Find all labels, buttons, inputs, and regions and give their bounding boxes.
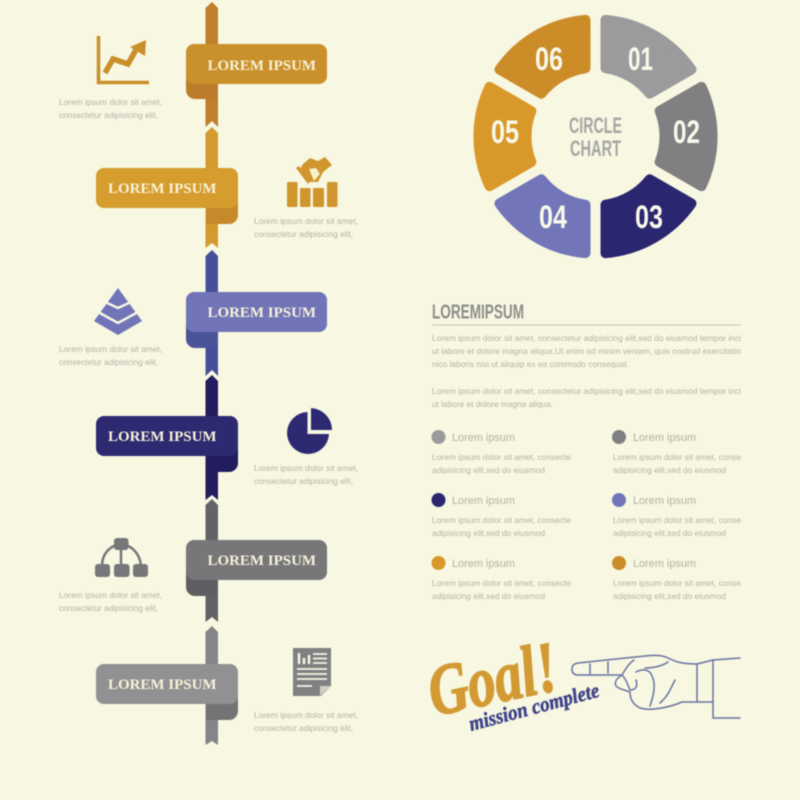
legend item: periwinkle: Lorem ipsum dolor sit amet, conse: [613, 515, 741, 525]
legend item: navy: adipisicing elit,sed do eiusmod: [432, 528, 545, 538]
segment 01: [606, 20, 692, 94]
center label: CIRCLE: [569, 113, 622, 138]
legend item: navy: Lorem ipsum: [452, 495, 515, 507]
icon: pyramid: [94, 288, 142, 335]
legend item: light grey: Lorem ipsum dolor sit amet, consecte: [432, 452, 571, 462]
legend item: dark gold: [612, 556, 741, 601]
heading: LOREMIPSUM: [432, 302, 524, 324]
caption 5: Lorem ipsum dolor sit amet,: [59, 590, 162, 600]
caption 6: consectetur adipisicing elit,: [254, 723, 353, 733]
caption 6: Lorem ipsum dolor sit amet,: [254, 710, 358, 720]
banner 1: LOREM IPSUM: [208, 58, 316, 74]
legend item: dark grey: [612, 430, 741, 475]
segment numbers: [491, 41, 700, 235]
paragraph text: Lorem ipsum dolor sit amet, consectetur adipisicing elit,sed do eiusmod tempor inci: [432, 386, 741, 396]
legend item: dark gold: Lorem ipsum dolor sit amet, conse: [613, 578, 741, 588]
caption 2: Lorem ipsum dolor sit amet,: [254, 216, 358, 226]
icon: line chart: [98, 36, 149, 82]
timeline spine: [206, 2, 218, 745]
segment 04: [500, 179, 586, 253]
legend item: periwinkle: [612, 493, 741, 538]
legend item: navy: Lorem ipsum dolor sit amet, consecte: [432, 515, 571, 525]
banner 6: [96, 664, 238, 720]
segment 06: [500, 0, 606, 106]
caption 2: [254, 216, 358, 239]
circle chart: [447, 0, 744, 278]
paragraph text: [432, 333, 741, 409]
legend item: dark grey: Lorem ipsum dolor sit amet, conse: [613, 452, 741, 462]
segment numbers: 05: [491, 114, 519, 150]
banner 6: LOREM IPSUM: [108, 677, 217, 693]
caption 4: [254, 463, 358, 486]
caption 5: consectetur adipisicing elit,: [59, 603, 158, 613]
caption 1: consectetur adipisicing elit,: [59, 110, 158, 120]
segment numbers: 06: [535, 41, 563, 77]
banner 2: [96, 168, 238, 224]
center label: [569, 113, 622, 161]
banner 2: LOREM IPSUM: [108, 181, 217, 197]
segment 02: [638, 87, 744, 198]
caption 3: consectetur adipisicing elit,: [59, 357, 158, 367]
center label: CHART: [570, 136, 621, 161]
icon: handshake and bars: [287, 157, 338, 207]
legend item: light gold: Lorem ipsum dolor sit amet, consecte: [432, 578, 571, 588]
legend item: dark gold: adipisicing elit,sed do eiusmod: [613, 591, 726, 601]
banner 3: [186, 292, 327, 348]
caption 1: [59, 97, 162, 120]
banner 5: LOREM IPSUM: [208, 553, 316, 569]
icon: network hierarchy: [95, 538, 148, 577]
legend item: light grey: adipisicing elit,sed do eiusmod: [432, 465, 545, 475]
segment numbers: 02: [673, 114, 700, 150]
legend item: dark gold: Lorem ipsum: [633, 558, 696, 570]
legend item: dark grey: Lorem ipsum: [633, 432, 696, 444]
icon: pointing hand: [572, 655, 740, 718]
segment numbers: 03: [635, 199, 663, 235]
legend item: light gold: Lorem ipsum: [452, 558, 515, 570]
caption 2: consectetur adipisicing elit,: [254, 229, 353, 239]
legend item: light grey: [432, 430, 571, 475]
legend item: light grey: Lorem ipsum: [452, 432, 515, 444]
segment 05: [447, 75, 553, 186]
caption 4: Lorem ipsum dolor sit amet,: [254, 463, 358, 473]
icon: document: [293, 648, 331, 696]
segment 03: [585, 167, 691, 278]
goal lettering: mission complete: [466, 678, 602, 736]
paragraph text: Lorem ipsum dolor sit amet, consectetur adipisicing elit,sed do eiusmod tempor inci: [432, 333, 741, 343]
banner 5: [186, 540, 327, 596]
legend item: periwinkle: Lorem ipsum: [633, 495, 696, 507]
paragraph text: ut labore et dolore magna aliqua.Ut enim ad minim veniam, quis nostrud exercitatio: [432, 346, 741, 356]
banner 4: LOREM IPSUM: [108, 429, 217, 445]
banner 3: LOREM IPSUM: [208, 305, 316, 321]
paragraph text: nico laboris nisi ut aliquip ex ea commodo consequat.: [432, 359, 629, 369]
banner 1: [186, 44, 327, 99]
caption 5: [59, 590, 162, 613]
legend item: periwinkle: adipisicing elit,sed do eiusmod: [613, 528, 726, 538]
paragraph text: ut labore et dolore magna aliqua.: [432, 399, 553, 409]
caption 6: [254, 710, 358, 733]
segment numbers: 01: [628, 41, 653, 77]
segment numbers: 04: [539, 199, 567, 235]
banner 4: [96, 416, 238, 472]
caption 3: Lorem ipsum dolor sit amet,: [59, 344, 162, 354]
legend item: navy: [432, 493, 571, 538]
goal lettering: Goal!: [421, 626, 564, 732]
caption 1: Lorem ipsum dolor sit amet,: [59, 97, 162, 107]
legend item: light gold: adipisicing elit,sed do eiusmod: [432, 591, 545, 601]
icon: pie chart: [287, 408, 332, 454]
legend item: dark grey: adipisicing elit,sed do eiusmod: [613, 465, 726, 475]
legend item: light gold: [432, 556, 571, 601]
caption 4: consectetur adipisicing elit,: [254, 476, 353, 486]
caption 3: [59, 344, 162, 367]
